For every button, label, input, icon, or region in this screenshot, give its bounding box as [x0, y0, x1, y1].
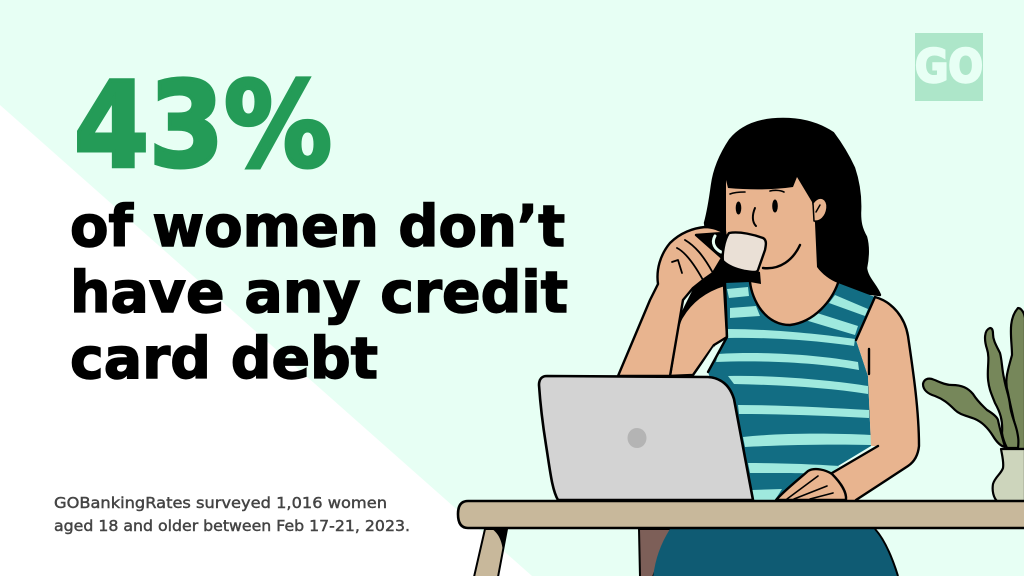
left armhole: [708, 283, 727, 372]
big statistic: 43%: [74, 56, 332, 194]
cup: [723, 232, 766, 272]
source note: aged 18 and older between Feb 17-21, 2023.: [54, 517, 410, 535]
gap beside torso: [695, 346, 714, 375]
hair: [705, 119, 880, 295]
headline: of women don’t: [70, 194, 565, 260]
neck and face: [726, 177, 838, 325]
left arm and hand: [618, 227, 724, 376]
tank top: [708, 282, 875, 501]
eye right: [772, 200, 778, 212]
right arm: [832, 297, 919, 500]
source note: GOBankingRates surveyed 1,016 women: [54, 494, 387, 512]
headline: have any credit: [70, 260, 568, 326]
headline: card debt: [70, 326, 378, 392]
fingers: [672, 240, 713, 280]
ear: [813, 198, 827, 221]
illustration: plant: [923, 308, 1024, 502]
eyes: [736, 202, 741, 214]
right arm outline: [832, 297, 919, 500]
logo: GO: GO: [915, 40, 983, 93]
stripes: [716, 287, 871, 500]
illustration: laptop: [539, 376, 753, 500]
shadow under cup and hand: [680, 230, 762, 319]
illustration: desk: [458, 501, 1024, 576]
gap between arm and hair: [680, 289, 693, 315]
laptop logo: [628, 428, 646, 448]
headline: [70, 194, 568, 392]
neckline: [750, 282, 838, 325]
source note: [54, 494, 410, 535]
eyebrows, nose, smile: [730, 190, 800, 268]
illustration: chair and skirt: [639, 529, 899, 576]
cup handle: [713, 236, 721, 252]
right hand: [776, 469, 846, 500]
illustration: woman: [618, 119, 919, 501]
shoulder left: [670, 285, 727, 376]
